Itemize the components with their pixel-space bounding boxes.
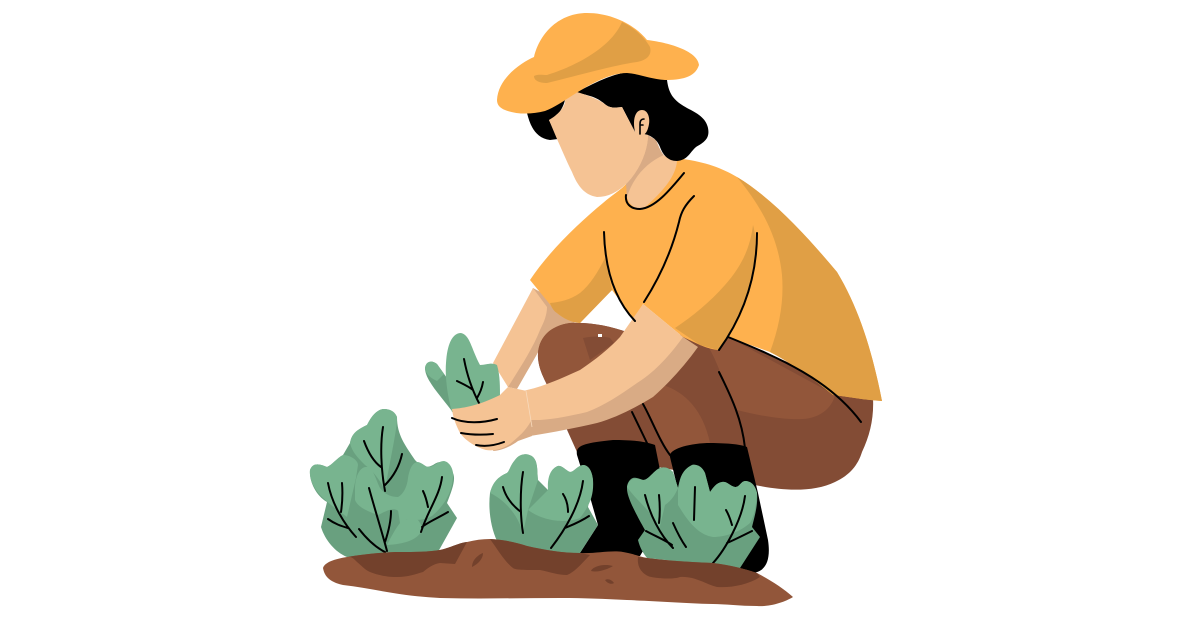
seedling in hand <box>425 333 500 415</box>
plant: left cluster light leaves <box>350 409 397 490</box>
hat <box>497 13 699 114</box>
front arm <box>515 304 698 436</box>
hair <box>577 72 708 161</box>
ear <box>634 110 649 135</box>
neck <box>626 135 677 209</box>
trousers <box>538 323 873 490</box>
plant: right <box>627 465 760 568</box>
plant: left cluster <box>310 409 457 557</box>
shirt shading <box>737 177 882 401</box>
knee highlight <box>598 334 602 337</box>
soil mound <box>323 539 793 606</box>
boots <box>577 440 769 573</box>
soil shadows <box>347 542 467 577</box>
plant: middle light leaves <box>490 454 538 533</box>
shirt seams and trouser folds <box>604 173 861 455</box>
plant: right light leaves <box>627 467 678 530</box>
hand <box>452 387 532 451</box>
plant: middle <box>489 454 598 556</box>
figure: farmer <box>493 13 882 573</box>
back arm <box>493 288 575 389</box>
face <box>549 92 648 197</box>
t-shirt <box>530 159 882 401</box>
